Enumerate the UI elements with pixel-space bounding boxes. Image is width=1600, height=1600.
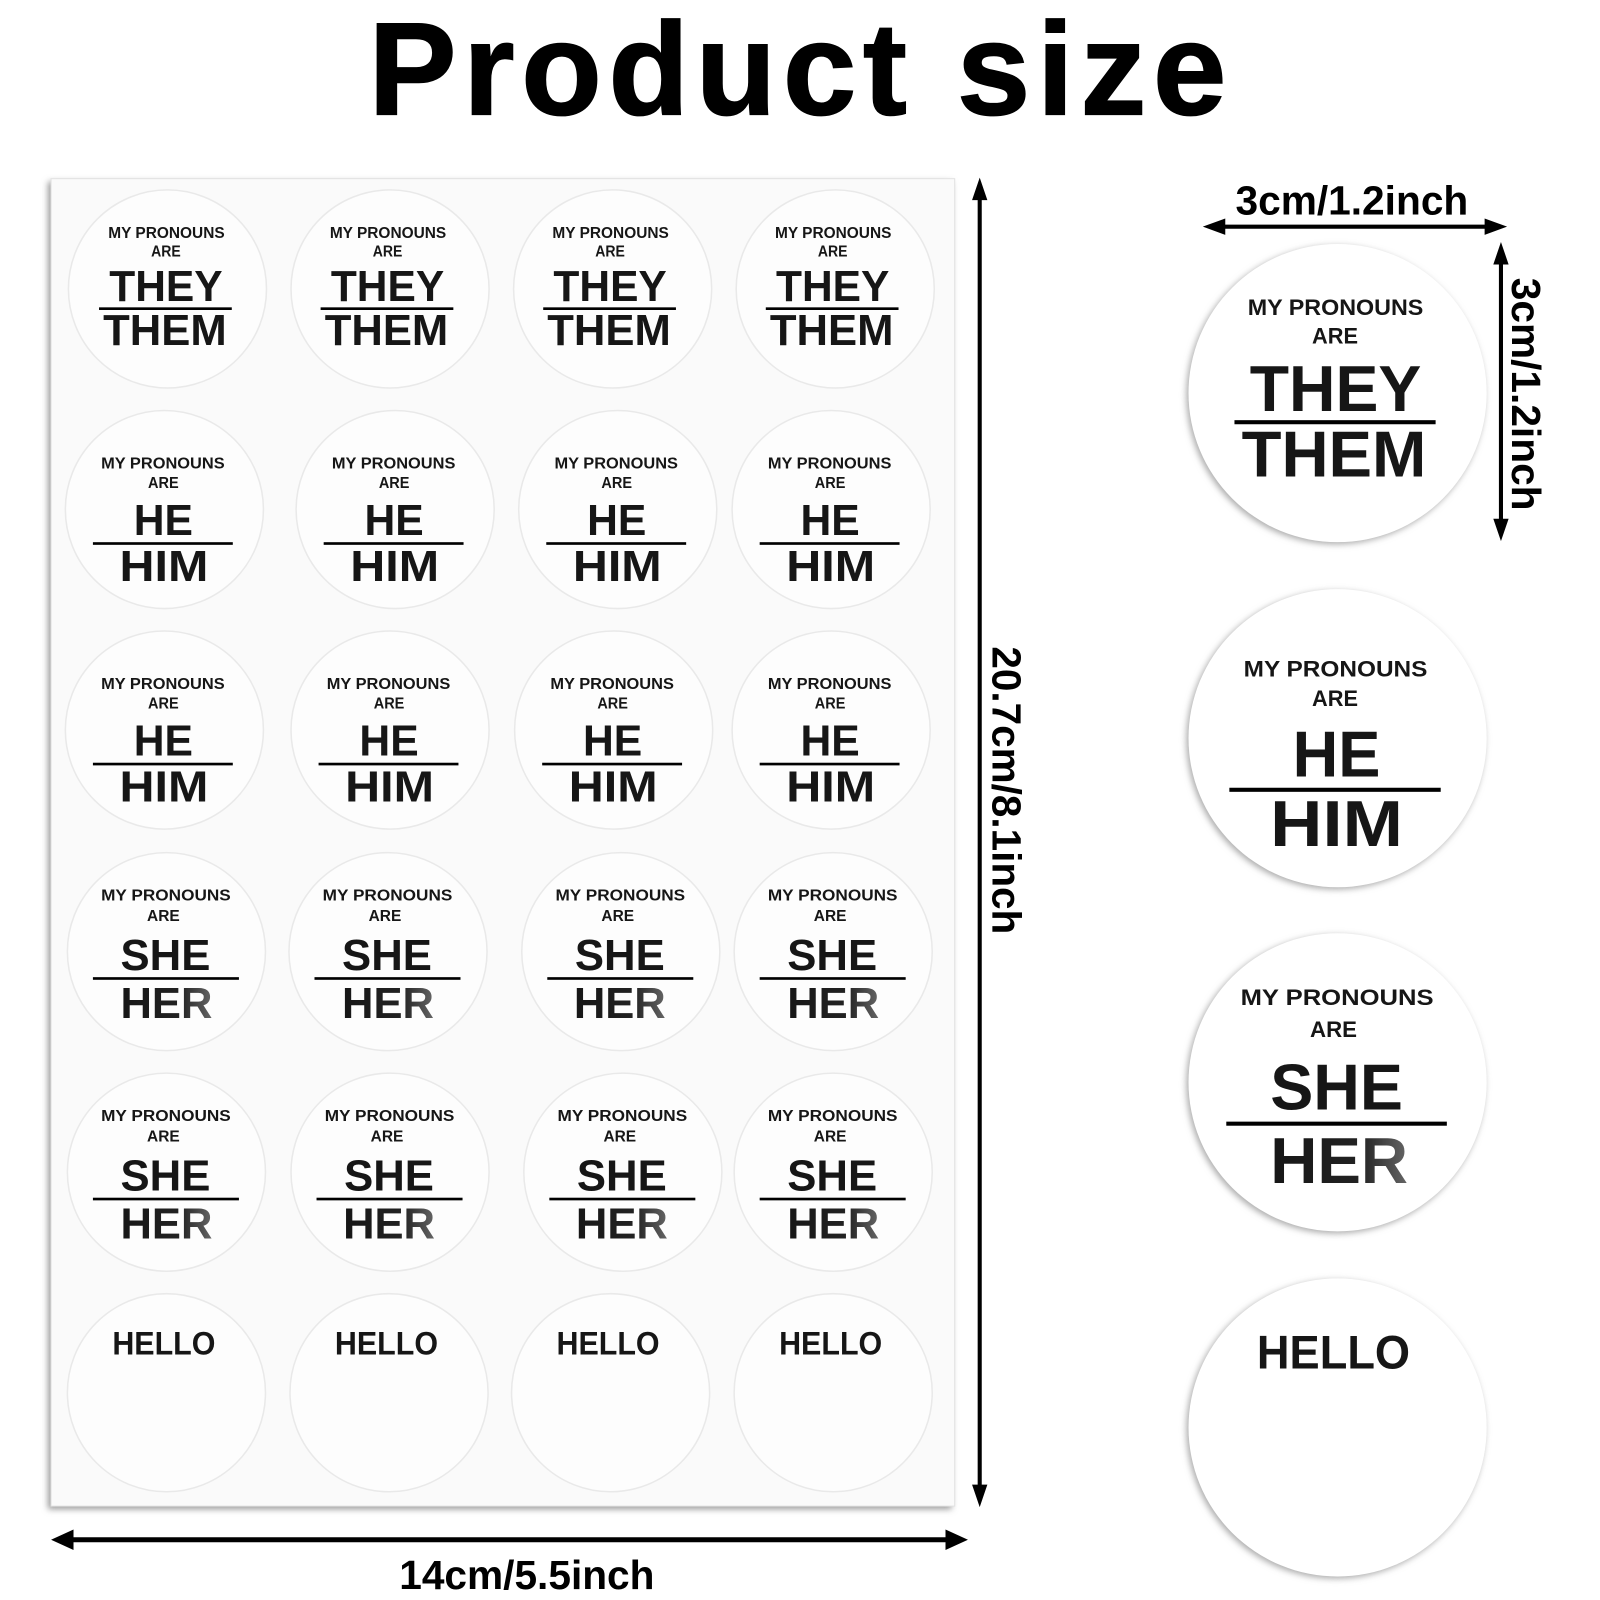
sticker: he/him 2: HE: [365, 496, 424, 545]
sticker: he/him 2: HIM: [350, 542, 439, 591]
sticker: she/her 8: HER: [787, 1200, 879, 1249]
sticker: he/him 4: ARE: [815, 475, 845, 492]
sticker: she/her 3: MY PRONOUNS: [555, 888, 685, 905]
sticker: they/them 2: ARE: [373, 243, 402, 260]
sticker: hello 1: [67, 1294, 265, 1492]
sticker: she/her 8: ARE: [814, 1129, 846, 1146]
sticker: they/them 4: ARE: [818, 243, 847, 260]
sticker: he/him 7: ARE: [597, 696, 628, 713]
sticker: they/them 3: [514, 190, 712, 388]
sticker: she/her 4: MY PRONOUNS: [768, 888, 898, 905]
large sticker: she/her: ARE: [1310, 1017, 1357, 1042]
large sticker: they/them: THEM: [1242, 417, 1426, 490]
panel: sticker sheet: [48, 179, 955, 1509]
sticker: she/her 2: HER: [342, 979, 434, 1028]
sticker: they/them 1: THEY: [109, 262, 223, 311]
label: sticker height: 3cm/1.2inch: [1503, 278, 1549, 511]
sticker: she/her 1: [67, 853, 265, 1051]
large sticker: he/him: ARE: [1312, 686, 1358, 711]
sticker: he/him 1: HIM: [119, 542, 208, 591]
sticker: he/him 4: [732, 410, 930, 609]
sticker: they/them 3: THEY: [553, 262, 667, 311]
sticker: she/her 7: SHE: [577, 1152, 667, 1201]
sticker: they/them 1: ARE: [151, 243, 181, 260]
sticker: hello 2: [290, 1294, 488, 1492]
sticker: they/them 1: [68, 190, 266, 388]
large sticker: she/her: MY PRONOUNS: [1241, 985, 1434, 1010]
sticker: they/them 2: MY PRONOUNS: [330, 225, 446, 242]
sticker: she/her 6: [291, 1073, 489, 1271]
sticker: they/them 1: MY PRONOUNS: [108, 225, 225, 242]
sticker: they/them 3: MY PRONOUNS: [552, 225, 669, 242]
sticker: she/her 6: SHE: [344, 1152, 434, 1201]
sticker: he/him 8: ARE: [815, 696, 845, 713]
sticker: he/him 2: ARE: [379, 475, 409, 492]
sticker: he/him 8: [732, 631, 930, 829]
sticker: hello 4: HELLO: [779, 1324, 882, 1361]
large sticker: hello: HELLO: [1257, 1326, 1410, 1379]
sticker: she/her 8: SHE: [787, 1152, 877, 1201]
sticker: he/him 5: MY PRONOUNS: [101, 676, 225, 693]
arrow: sticker height: [1493, 242, 1509, 541]
sticker: he/him 4: HIM: [786, 542, 875, 591]
large sticker: he/him: [1186, 589, 1487, 889]
sticker: she/her 6: HER: [343, 1200, 435, 1249]
sticker: she/her 4: [734, 853, 932, 1051]
large sticker: he/him: HIM: [1270, 787, 1403, 860]
sticker: they/them 2: THEY: [331, 262, 444, 311]
sticker: she/her 3: ARE: [601, 908, 634, 925]
sticker: he/him 5: HIM: [119, 763, 208, 812]
sticker: she/her 2: [289, 853, 487, 1051]
sticker: she/her 7: [524, 1073, 722, 1271]
sticker: he/him 7: MY PRONOUNS: [550, 676, 674, 693]
sticker: he/him 2: MY PRONOUNS: [332, 456, 455, 473]
sticker: he/him 7: [515, 631, 713, 829]
sticker: she/her 3: HER: [574, 979, 666, 1028]
sticker: she/her 5: MY PRONOUNS: [101, 1108, 231, 1125]
sticker: they/them 4: [736, 190, 934, 388]
sticker: she/her 6: MY PRONOUNS: [325, 1108, 454, 1125]
sticker: she/her 5: HER: [120, 1200, 212, 1249]
sticker: he/him 6: ARE: [374, 696, 404, 713]
sticker: she/her 7: HER: [576, 1200, 668, 1249]
sticker: he/him 3: [519, 410, 717, 609]
sticker: he/him 5: [65, 631, 263, 829]
sticker: he/him 6: HE: [359, 717, 419, 766]
sticker: he/him 8: HIM: [786, 763, 875, 812]
large sticker: they/them: ARE: [1312, 324, 1358, 349]
sticker: he/him 3: ARE: [601, 475, 632, 492]
large sticker: she/her: SHE: [1270, 1050, 1403, 1123]
sticker: she/her 1: HER: [120, 979, 212, 1028]
label: sheet width: 14cm/5.5inch: [399, 1552, 654, 1598]
sticker: hello 1: HELLO: [112, 1324, 215, 1361]
sticker: she/her 3: [522, 853, 720, 1051]
sticker: he/him 3: HIM: [573, 542, 662, 591]
sticker: hello 3: HELLO: [556, 1324, 660, 1361]
sticker: he/him 6: [291, 631, 489, 829]
sticker: he/him 1: MY PRONOUNS: [101, 456, 225, 473]
large sticker: he/him: HE: [1293, 718, 1380, 791]
sticker: he/him 7: HIM: [569, 763, 658, 812]
sticker: they/them 3: ARE: [595, 243, 625, 260]
sticker: he/him 4: HE: [801, 496, 860, 545]
sticker: they/them 1: THEM: [103, 306, 227, 355]
sticker: she/her 2: SHE: [342, 931, 432, 980]
sticker: she/her 1: MY PRONOUNS: [101, 888, 231, 905]
sticker: they/them 4: THEY: [776, 262, 889, 311]
sticker: he/him 8: MY PRONOUNS: [768, 676, 891, 693]
sticker: she/her 5: SHE: [120, 1152, 210, 1201]
large sticker: hello: [1186, 1278, 1487, 1579]
sticker: he/him 4: MY PRONOUNS: [768, 456, 891, 473]
sticker: hello 3: [512, 1294, 710, 1492]
sticker: she/her 4: ARE: [814, 908, 846, 925]
arrow: sheet width: [51, 1530, 968, 1550]
label: sheet height: 20.7cm/8.1inch: [983, 646, 1029, 934]
sticker: she/her 4: HER: [787, 979, 879, 1028]
sticker: he/him 1: [65, 410, 263, 609]
sticker: they/them 3: THEM: [547, 306, 671, 355]
sticker: they/them 4: MY PRONOUNS: [775, 225, 891, 242]
sticker: she/her 2: MY PRONOUNS: [323, 888, 452, 905]
large sticker: he/him: MY PRONOUNS: [1244, 656, 1427, 681]
arrow: sheet height: [972, 178, 987, 1507]
large sticker: they/them: [1186, 244, 1487, 544]
sticker: they/them 2: THEM: [325, 306, 448, 355]
sticker: they/them 4: THEM: [770, 306, 893, 355]
sticker: he/him 3: MY PRONOUNS: [554, 456, 678, 473]
sticker: he/him 6: MY PRONOUNS: [327, 676, 450, 693]
sticker: she/her 1: SHE: [120, 931, 210, 980]
sticker: hello 2: HELLO: [335, 1324, 438, 1361]
sticker: she/her 7: MY PRONOUNS: [557, 1108, 687, 1125]
sticker: he/him 5: HE: [134, 717, 193, 766]
sticker: he/him 8: HE: [801, 717, 860, 766]
large sticker: they/them: THEY: [1250, 352, 1421, 425]
sticker: he/him 2: [296, 410, 494, 609]
sticker: she/her 3: SHE: [575, 931, 665, 980]
sticker: he/him 7: HE: [583, 717, 642, 766]
large sticker: she/her: [1186, 933, 1487, 1233]
sticker: he/him 3: HE: [587, 496, 646, 545]
sticker: she/her 4: SHE: [787, 931, 877, 980]
sticker: he/him 6: HIM: [345, 763, 434, 812]
sticker: he/him 1: ARE: [148, 475, 179, 492]
large sticker: she/her: HER: [1270, 1124, 1408, 1197]
sticker: she/her 7: ARE: [603, 1129, 636, 1146]
sticker: hello 4: [734, 1294, 932, 1492]
sticker: he/him 5: ARE: [148, 696, 179, 713]
sticker: she/her 2: ARE: [369, 908, 401, 925]
sticker: he/him 1: HE: [134, 496, 193, 545]
label: sticker width: 3cm/1.2inch: [1235, 177, 1468, 223]
arrow: sticker width: [1203, 219, 1507, 235]
sticker: they/them 2: [291, 190, 489, 388]
sticker: she/her 6: ARE: [371, 1129, 403, 1146]
sticker: she/her 1: ARE: [147, 908, 180, 925]
sticker: she/her 8: MY PRONOUNS: [768, 1108, 898, 1125]
large sticker: they/them: MY PRONOUNS: [1248, 295, 1423, 320]
sticker: she/her 5: [67, 1073, 265, 1271]
sticker: she/her 5: ARE: [147, 1129, 180, 1146]
sticker: she/her 8: [734, 1073, 932, 1271]
